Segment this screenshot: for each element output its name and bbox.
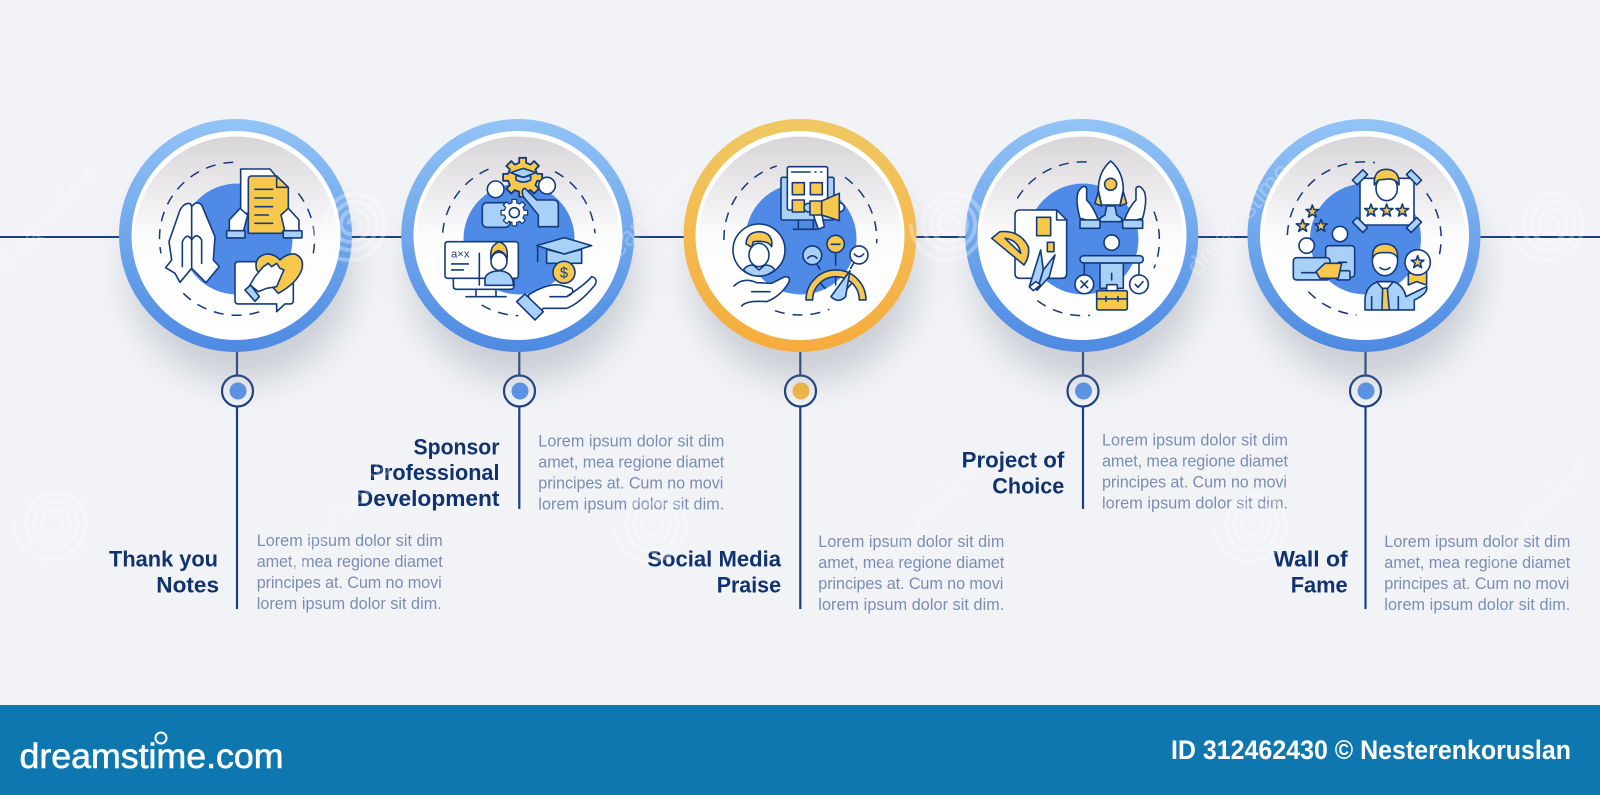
watermark overlay: dreamstime <box>870 454 987 578</box>
stem and node <box>1350 350 1381 609</box>
text block <box>257 532 443 613</box>
stem and node <box>1068 350 1098 509</box>
text block <box>818 533 1005 614</box>
heading <box>1273 546 1348 598</box>
stem and node <box>785 350 816 609</box>
heading: Development <box>357 486 500 511</box>
text block: principes at. Cum no movi <box>257 574 442 592</box>
text block: lorem ipsum dolor sit dim. <box>257 595 442 613</box>
circle badge <box>1248 119 1481 382</box>
text block: Lorem ipsum dolor sit dim <box>257 532 443 550</box>
text block: amet, mea regione diamet <box>538 454 725 472</box>
panel: Wall of Fame <box>1248 119 1571 614</box>
text block: amet, mea regione diamet <box>257 553 443 571</box>
icon: wall of fame <box>1287 162 1441 315</box>
horizontal timeline line <box>0 236 1600 238</box>
text block: lorem ipsum dolor sit dim. <box>538 496 724 514</box>
watermark overlay: dreamstime <box>280 453 397 577</box>
panel: Thank you Notes <box>109 119 443 613</box>
icon: thanks, document and heart <box>159 162 314 315</box>
text block: lorem ipsum dolor sit dim. <box>818 596 1004 614</box>
stem and node <box>222 350 253 609</box>
text block <box>538 432 725 514</box>
heading <box>109 546 219 598</box>
icon: training and funding <box>443 158 596 320</box>
text block: principes at. Cum no movi <box>538 474 723 492</box>
text block: principes at. Cum no movi <box>1102 474 1287 492</box>
text block: principes at. Cum no movi <box>1384 575 1569 593</box>
heading <box>962 448 1065 498</box>
text block: amet, mea regione diamet <box>1384 554 1571 572</box>
text block: principes at. Cum no movi <box>818 575 1003 593</box>
footer logo: dreamstime.com <box>20 737 284 776</box>
heading: Notes <box>156 572 219 598</box>
text block: Lorem ipsum dolor sit dim <box>1384 533 1570 551</box>
circle badge <box>119 119 353 382</box>
text block <box>1384 533 1571 614</box>
text block: amet, mea regione diamet <box>818 554 1005 572</box>
heading <box>647 546 781 598</box>
watermark overlay: dreamstime <box>1478 454 1595 578</box>
heading: Professional <box>370 460 500 485</box>
text block: Lorem ipsum dolor sit dim <box>1102 432 1288 450</box>
text block: amet, mea regione diamet <box>1102 453 1288 471</box>
circle badge <box>401 119 635 382</box>
icon: training and funding: $ <box>560 266 568 282</box>
watermark overlay <box>0 157 1595 578</box>
icon: project selection <box>992 161 1159 316</box>
footer credit: ID 312462430 © Nesterenkoruslan <box>1171 735 1571 765</box>
icon: training and funding: a×x <box>451 249 470 261</box>
heading <box>357 434 500 511</box>
circle badge <box>684 119 917 382</box>
heading: Fame <box>1291 572 1348 598</box>
heading: Social Media <box>647 546 781 572</box>
heading: Project of <box>962 448 1065 472</box>
heading: Thank you <box>109 546 218 572</box>
heading: Praise <box>717 572 781 598</box>
heading: Choice <box>992 473 1064 498</box>
heading: Sponsor <box>414 434 500 459</box>
watermark overlay: dreamstime <box>585 157 702 281</box>
icon: social praise and gauge <box>724 166 877 315</box>
text block: lorem ipsum dolor sit dim. <box>1384 596 1570 614</box>
watermark overlay: dreamstime <box>1180 157 1297 281</box>
stem and node <box>504 350 535 509</box>
panel: Sponsor Professional Development <box>357 119 725 514</box>
text block <box>1102 432 1288 513</box>
text block: lorem ipsum dolor sit dim. <box>1102 495 1288 513</box>
panel: Project of Choice <box>962 119 1288 513</box>
panel: Social Media Praise <box>647 119 1005 614</box>
text block: Lorem ipsum dolor sit dim <box>818 533 1004 551</box>
footer bar <box>0 705 1600 795</box>
circle badge <box>965 119 1199 382</box>
heading: Wall of <box>1273 546 1348 572</box>
text block: Lorem ipsum dolor sit dim <box>538 432 724 450</box>
